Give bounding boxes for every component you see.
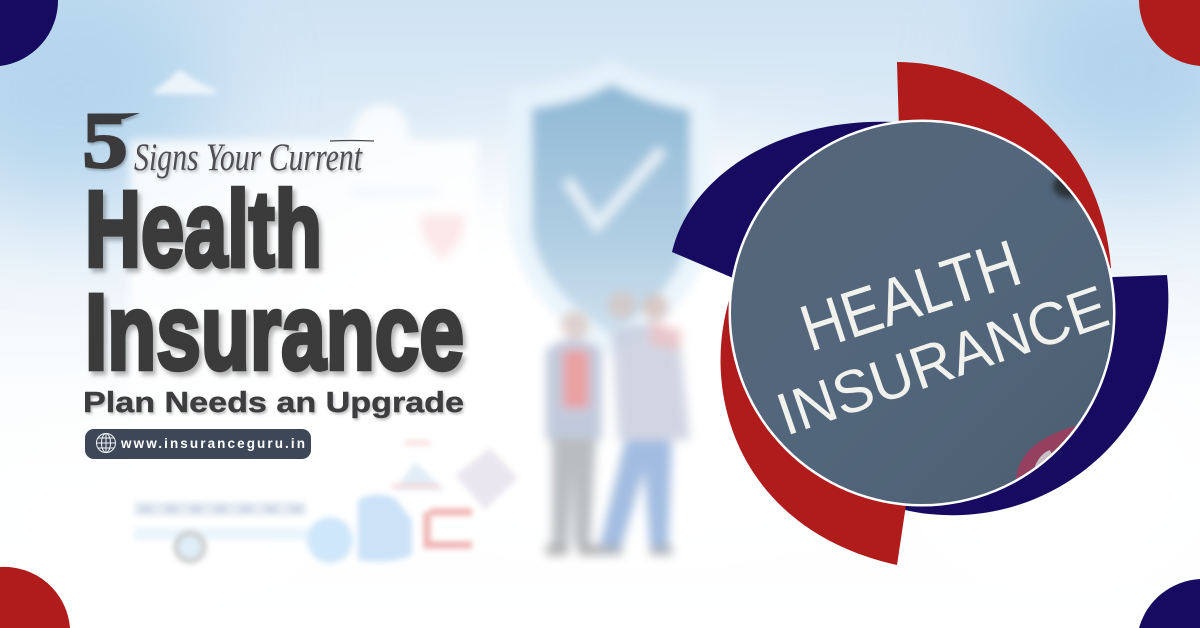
family illustration (546, 291, 690, 555)
corner: bottom-right navy (1139, 579, 1200, 628)
corner: top-left navy (0, 0, 58, 66)
arc: red top-right (897, 62, 1111, 300)
numeral: 5 (82, 97, 140, 185)
numeral: 5: 5 (82, 97, 128, 185)
title: Insurance: Insurance (85, 271, 464, 392)
clipboard (126, 102, 478, 336)
cloud (152, 69, 216, 94)
photo chalk text: HEALTH (791, 225, 1029, 365)
ambulance and medicine props (134, 443, 518, 563)
photo: health insurance chalkboard (728, 120, 1116, 506)
arc: navy top-left (672, 122, 922, 278)
url text: www.insuranceguru.in (120, 436, 305, 451)
corner: bottom-left red (0, 567, 70, 628)
photo chalk text: INSURANCE (768, 273, 1116, 448)
script line: signs your current: Signs Your Current (134, 136, 363, 179)
corner: top-right red (1139, 0, 1200, 66)
photo red pin (1016, 426, 1076, 479)
icon: globe (96, 434, 116, 452)
website pill (85, 429, 311, 459)
photo dark object (1050, 176, 1076, 201)
title: Health: Health (85, 168, 322, 289)
subtitle: Plan Needs an Upgrade (83, 387, 464, 419)
shield with check mark (510, 60, 712, 355)
arc: navy bottom-right (905, 275, 1168, 515)
arc: red bottom-left (721, 285, 922, 565)
script crossbar decoration (330, 140, 374, 142)
